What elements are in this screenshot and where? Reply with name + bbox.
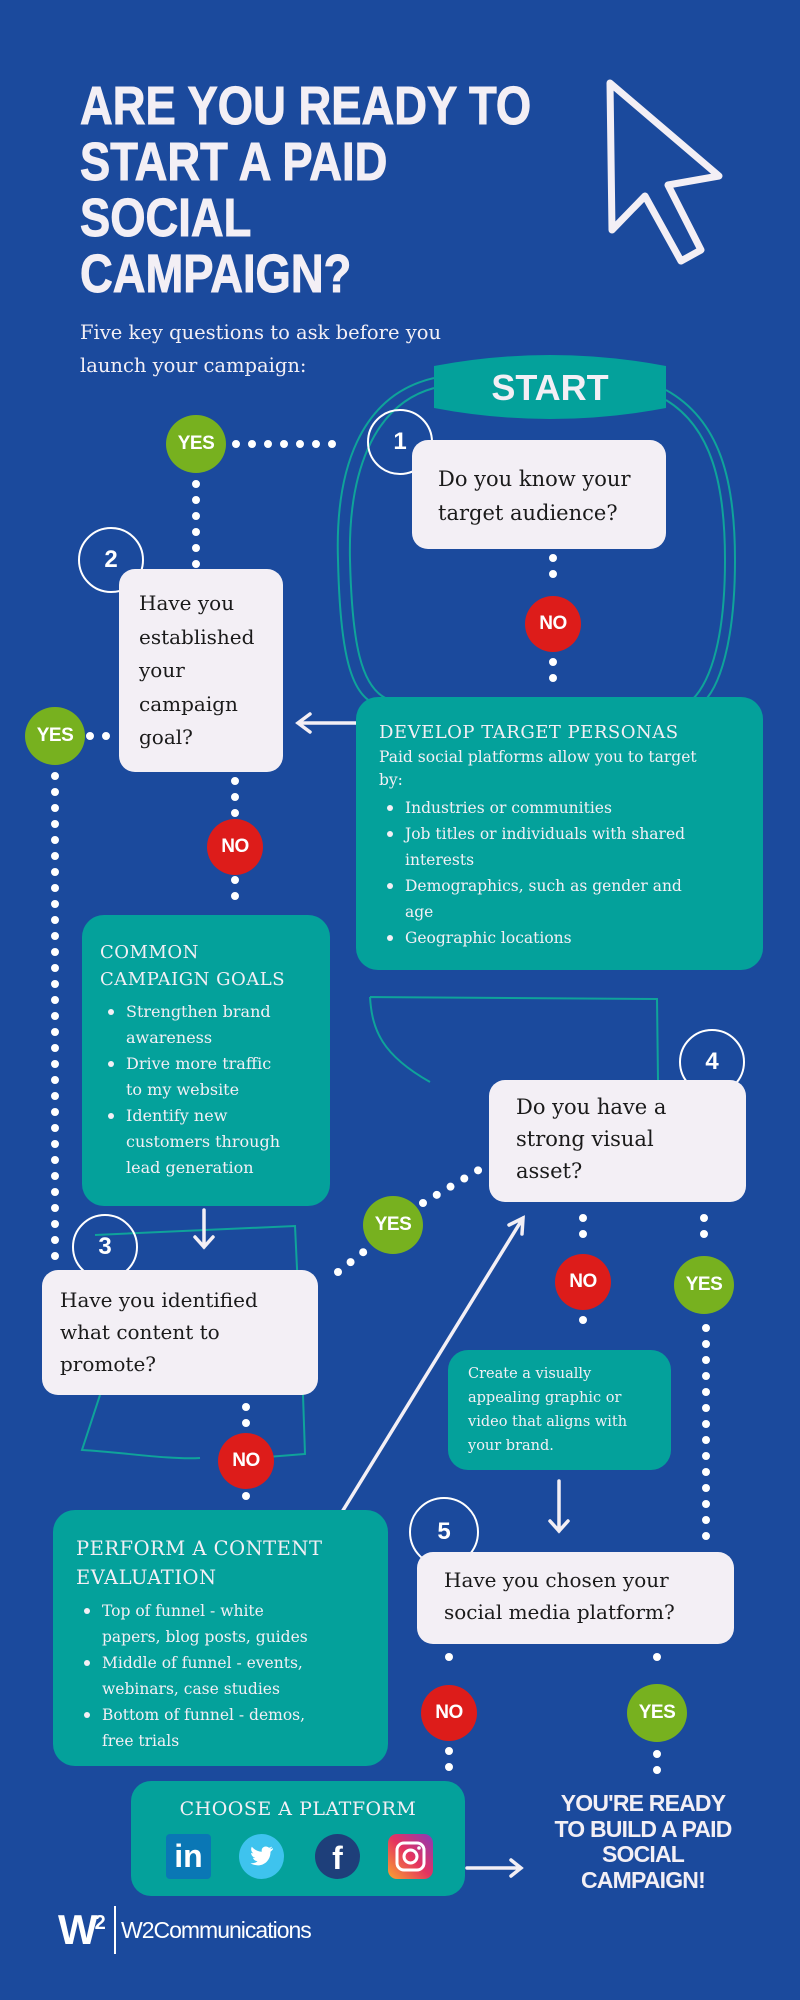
question 1 box: target audience?	[438, 501, 618, 525]
yes badge 1: YES	[178, 433, 214, 454]
no badge 2: NO	[221, 836, 249, 857]
question 2 box: goal?	[139, 725, 193, 749]
start banner: START	[491, 367, 609, 408]
subtitle: Five key questions to ask before you	[80, 321, 441, 344]
question 4 box	[489, 1080, 746, 1202]
no badge 4	[555, 1254, 611, 1310]
panel: develop target personas: Geographic locations	[405, 929, 572, 947]
number 1: 1	[393, 428, 407, 455]
yes badge 3: YES	[375, 1214, 411, 1235]
question 2 box: Have you	[139, 591, 234, 615]
panel: common campaign goals	[82, 915, 330, 1206]
question 3 box	[42, 1270, 318, 1395]
panel: perform content evaluation: Top of funnel - white	[102, 1602, 264, 1620]
question 5 box	[417, 1552, 734, 1644]
panel: perform content evaluation: papers, blog posts, guides	[102, 1628, 308, 1646]
number 5: 5	[437, 1518, 451, 1545]
icon: facebook	[315, 1834, 360, 1879]
number 3	[72, 1214, 138, 1280]
question 2 box: campaign	[139, 692, 238, 716]
title: SOCIAL	[80, 188, 251, 248]
title: ARE YOU READY TO	[80, 76, 531, 136]
title: CAMPAIGN?	[80, 244, 351, 304]
question 3 box: promote?	[60, 1352, 156, 1376]
panel: common campaign goals: awareness	[126, 1028, 212, 1047]
panel: create visual: video that aligns with	[468, 1414, 627, 1430]
panel: perform content evaluation: PERFORM A CONTENT	[76, 1537, 322, 1560]
subtitle	[80, 321, 441, 377]
final message	[554, 1790, 732, 1892]
question 3 box: what content to	[60, 1320, 220, 1344]
panel: develop target personas: Industries or communities	[405, 799, 612, 817]
final message: YOU'RE READY	[561, 1790, 725, 1816]
icon: linkedin: in	[174, 1838, 203, 1874]
question 4 box: asset?	[516, 1159, 582, 1183]
panel: common campaign goals: Drive more traffic	[126, 1054, 271, 1073]
panel: create visual: appealing graphic or	[468, 1390, 621, 1406]
panel: perform content evaluation: free trials	[102, 1732, 179, 1750]
arrow: goals down	[193, 1208, 215, 1250]
question 5 box: social media platform?	[444, 1600, 675, 1624]
yes badge 5	[627, 1684, 687, 1742]
number 2	[78, 527, 144, 593]
no badge 1: NO	[539, 613, 567, 634]
panel: develop target personas: Demographics, such as gender and	[405, 877, 682, 895]
question 2 box: your	[139, 658, 185, 682]
subtitle: launch your campaign:	[80, 354, 306, 377]
icon: cursor	[606, 80, 722, 264]
yes badge 1	[166, 415, 226, 473]
start banner	[434, 355, 666, 419]
number 1	[367, 409, 433, 475]
panel: develop target personas: Paid social platforms allow you to target	[379, 748, 697, 766]
logo	[58, 1906, 311, 1954]
panel: choose a platform	[131, 1781, 465, 1896]
no badge 3: NO	[232, 1450, 260, 1471]
panel: develop target personas: age	[405, 903, 433, 921]
final message: TO BUILD A PAID	[554, 1816, 732, 1842]
number 3: 3	[98, 1233, 112, 1260]
panel: create visual: your brand.	[468, 1438, 554, 1454]
panel: perform content evaluation: Bottom of funnel - demos,	[102, 1706, 305, 1724]
panel: common campaign goals: CAMPAIGN GOALS	[100, 969, 285, 990]
yes badge 2: YES	[37, 725, 73, 746]
arrow: create down	[548, 1479, 570, 1534]
panel: common campaign goals: to my website	[126, 1080, 239, 1099]
question 2 box: established	[139, 624, 254, 648]
no badge 5: NO	[435, 1702, 463, 1723]
no badge 5	[421, 1685, 477, 1741]
final message: SOCIAL	[602, 1841, 684, 1867]
panel: develop target personas: Job titles or individuals with shared	[405, 825, 685, 843]
panel: perform content evaluation: EVALUATION	[76, 1566, 217, 1589]
question 4 box: Do you have a	[516, 1095, 666, 1119]
yes badge 4	[674, 1256, 734, 1314]
question 5 box: Have you chosen your	[444, 1568, 669, 1592]
panel: common campaign goals: Strengthen brand	[126, 1002, 271, 1021]
question 3 box: Have you identified	[60, 1288, 258, 1312]
panel: develop target personas: by:	[379, 771, 403, 789]
question 1 box	[412, 440, 666, 549]
logo: W2Communications	[121, 1917, 311, 1943]
panel: develop target personas: DEVELOP TARGET PERSONAS	[379, 722, 679, 743]
no badge 2	[207, 819, 263, 875]
arrow: platform to ready	[465, 1858, 524, 1878]
question 4 box: strong visual	[516, 1127, 654, 1151]
panel: perform content evaluation: webinars, case studies	[102, 1680, 280, 1698]
panel: develop target personas: interests	[405, 851, 474, 869]
no badge 4: NO	[569, 1271, 597, 1292]
question 1 box: Do you know your	[438, 467, 630, 491]
logo: W2	[58, 1906, 103, 1953]
icon: facebook: f	[332, 1840, 343, 1876]
title: START A PAID	[80, 132, 387, 192]
icon: linkedin	[166, 1834, 211, 1879]
title	[80, 76, 531, 304]
panel: develop target personas	[356, 697, 763, 970]
yes badge 2	[25, 707, 85, 765]
panel: common campaign goals: Identify new	[126, 1106, 227, 1125]
yes badge 5: YES	[639, 1702, 675, 1723]
panel: create visual	[448, 1350, 671, 1470]
arrow: personas to question 2	[295, 712, 356, 734]
number 2: 2	[104, 546, 118, 573]
panel: perform content evaluation: Middle of funnel - events,	[102, 1654, 303, 1672]
panel: create visual: Create a visually	[468, 1366, 591, 1382]
no badge 1	[525, 596, 581, 652]
number 4: 4	[705, 1048, 719, 1075]
panel: common campaign goals: lead generation	[126, 1158, 254, 1177]
question 2 box	[119, 569, 283, 772]
number 4	[679, 1029, 745, 1095]
panel: choose a platform: CHOOSE A PLATFORM	[180, 1798, 416, 1820]
number 5	[409, 1497, 479, 1567]
panel: perform content evaluation	[53, 1510, 388, 1766]
no badge 3	[218, 1433, 274, 1489]
panel: common campaign goals: COMMON	[100, 942, 199, 963]
icon: twitter	[239, 1834, 284, 1879]
final message: CAMPAIGN!	[581, 1866, 705, 1892]
arrow: diagonal to question 4	[341, 1215, 525, 1510]
yes badge 3	[363, 1196, 423, 1254]
yes badge 4: YES	[686, 1274, 722, 1295]
icon: instagram	[388, 1834, 433, 1879]
panel: common campaign goals: customers through	[126, 1132, 280, 1151]
